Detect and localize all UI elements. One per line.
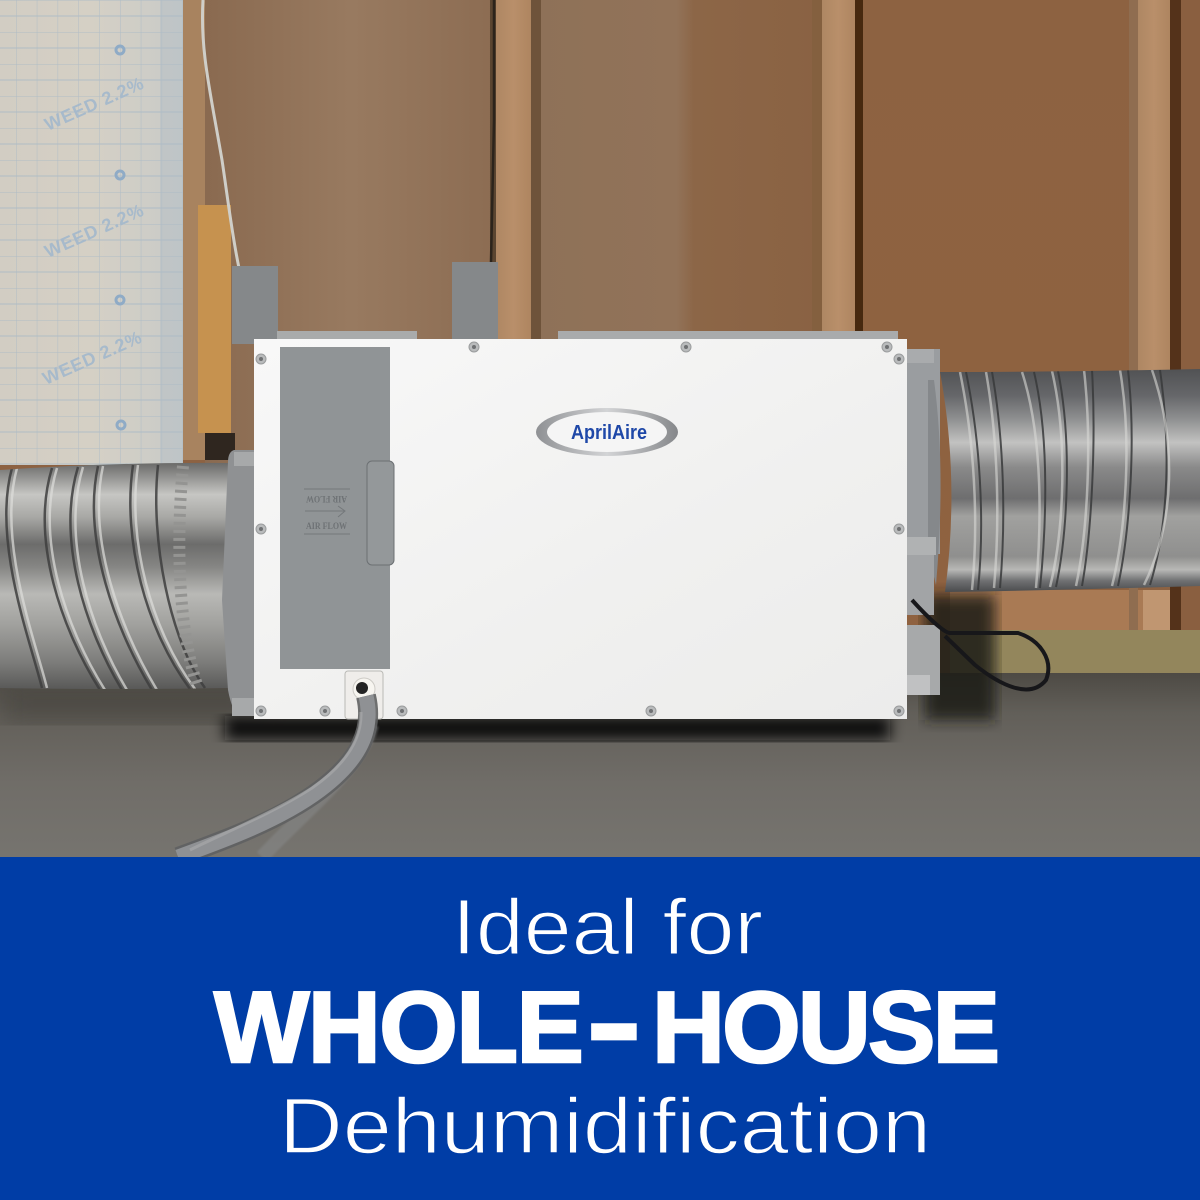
baseboard <box>950 630 1200 673</box>
panel: insulation board: WEED 2.2% <box>39 327 144 389</box>
dehumidifier side housings <box>222 331 941 716</box>
panel: basement wall background <box>0 0 1200 700</box>
right duct <box>940 369 1200 592</box>
air flow embossed label <box>304 489 350 534</box>
screws <box>256 342 904 716</box>
left duct <box>0 463 228 690</box>
banner background <box>0 857 1200 1200</box>
AprilAire logo: AprilAire <box>571 422 647 444</box>
AprilAire logo <box>536 408 678 456</box>
wires and junction boxes <box>202 0 498 344</box>
line: Ideal for: Ideal for <box>452 882 763 971</box>
air flow embossed label: AIR FLOW <box>306 493 347 503</box>
line: Dehumidification: Dehumidification <box>279 1081 931 1170</box>
wood studs <box>183 0 1170 632</box>
panel: insulation board <box>0 0 183 465</box>
line: WHOLE-HOUSE: HOUSE <box>652 972 997 1084</box>
line: WHOLE-HOUSE: WHOLE <box>214 972 582 1084</box>
drain port <box>345 671 383 719</box>
grey door panel <box>280 347 394 669</box>
floor shadows <box>0 595 995 740</box>
banner heading <box>214 882 997 1170</box>
line: WHOLE-HOUSE: - <box>589 968 639 1080</box>
panel: insulation board: WEED 2.2% <box>41 73 146 135</box>
air flow embossed label: AIR FLOW <box>306 522 347 532</box>
drain hose <box>178 696 372 857</box>
dehumidifier white cabinet <box>254 339 907 719</box>
panel: insulation board: WEED 2.2% <box>41 200 146 262</box>
floor <box>0 673 1200 857</box>
power cord <box>912 600 1048 689</box>
